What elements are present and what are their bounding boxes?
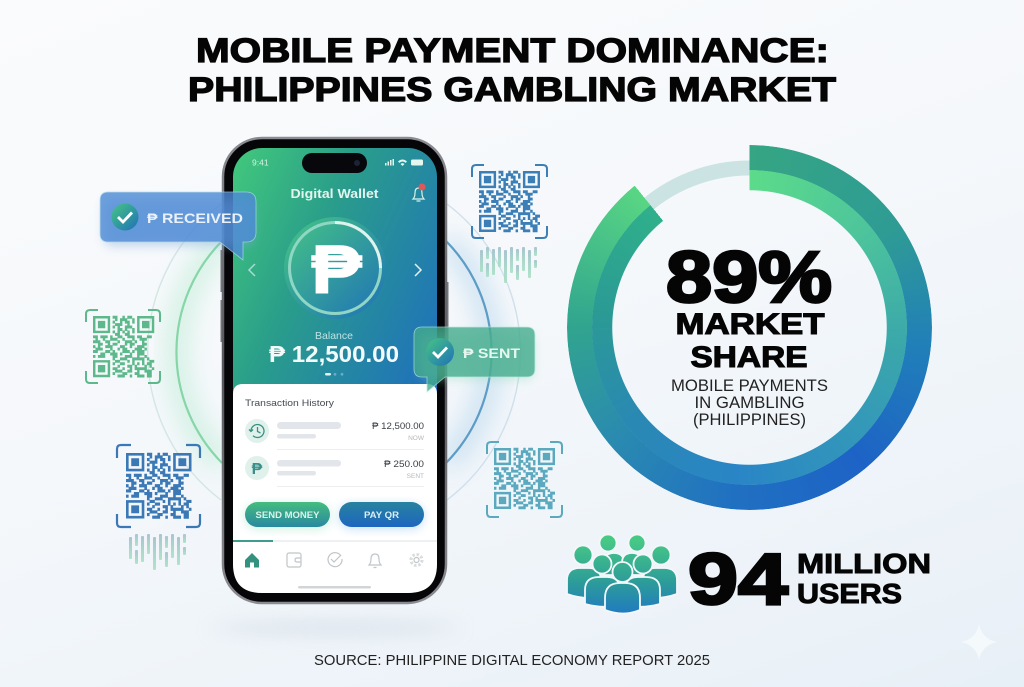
donut centre text: IN GAMBLING [694,394,804,412]
donut track [644,160,750,210]
donut centre text: 89% [666,238,832,318]
phone shadow [210,621,460,635]
pay qr button: PAY QR [364,510,400,520]
home indicator [298,586,371,588]
QR code: blue upper right [472,165,547,283]
transaction row 1: ₱ 12,500.00 [372,421,424,432]
sent notification bubble: ₱ SENT [463,345,520,361]
balance: ₱ 12,500.00 [269,341,399,367]
camera island [302,153,367,173]
icon: home [245,553,259,568]
orbit rings around the phone [148,204,520,500]
source: SOURCE: PHILIPPINE DIGITAL ECONOMY REPORT 2025 [314,653,710,669]
stat: 94 million users [688,540,931,620]
donut inner band [592,170,907,485]
transaction row 2: ₱ 250.00 [384,459,424,470]
panel: donut chart 89% [567,145,932,510]
stat: 94 million users: MILLION [797,548,931,579]
donut centre text: SHARE [690,341,808,374]
carousel arrows [249,264,421,276]
transaction row 1 [245,419,425,443]
phone screen [233,148,437,593]
transaction row 2: ₱ [252,461,263,478]
donut centre text [666,238,832,429]
donut centre text: MARKET [676,308,824,341]
transaction card [233,384,437,593]
pagination dots [325,373,343,376]
donut centre text: MOBILE PAYMENTS [671,377,828,395]
sent notification bubble [414,327,535,392]
stat: 94 million users: 94 [688,540,788,620]
title: MOBILE PAYMENT DOMINANCE: [196,32,829,70]
icon: sparkle [961,624,997,660]
donut centre text: (PHILIPPINES) [693,411,806,429]
QR code: green left [86,310,160,383]
peso coin [284,217,386,319]
received notification bubble: ₱ RECEIVED [147,210,243,226]
status bar: 9:41 [252,158,269,168]
transaction row 2 [245,456,424,480]
QR code: blue lower left [117,445,200,570]
balance: Balance [315,330,353,342]
tab bar [233,540,437,588]
transaction row 2: SENT [407,473,424,480]
received notification bubble [100,192,256,260]
QR code: teal lower right [487,442,562,517]
status bar [252,158,423,168]
balance [269,330,399,367]
send money button: SEND MONEY [256,510,320,520]
pay qr button [339,502,424,529]
peso coin: ₱ [312,232,362,308]
icon: group of users [567,534,677,614]
card heading: Transaction History [245,398,334,409]
icon: bell [369,554,381,568]
icon: gear [411,554,422,566]
title: PHILIPPINES GAMBLING MARKET [188,71,836,109]
title [188,32,836,109]
phone [100,138,535,603]
icon: wallet [287,553,301,567]
transaction row 1: NOW [408,435,425,442]
icon: check [328,553,342,567]
send money button [245,502,330,529]
stat: 94 million users: USERS [797,578,902,609]
wallet heading: Digital Wallet [290,186,379,201]
bell icon with notification [413,184,426,201]
donut outer band [567,145,932,510]
